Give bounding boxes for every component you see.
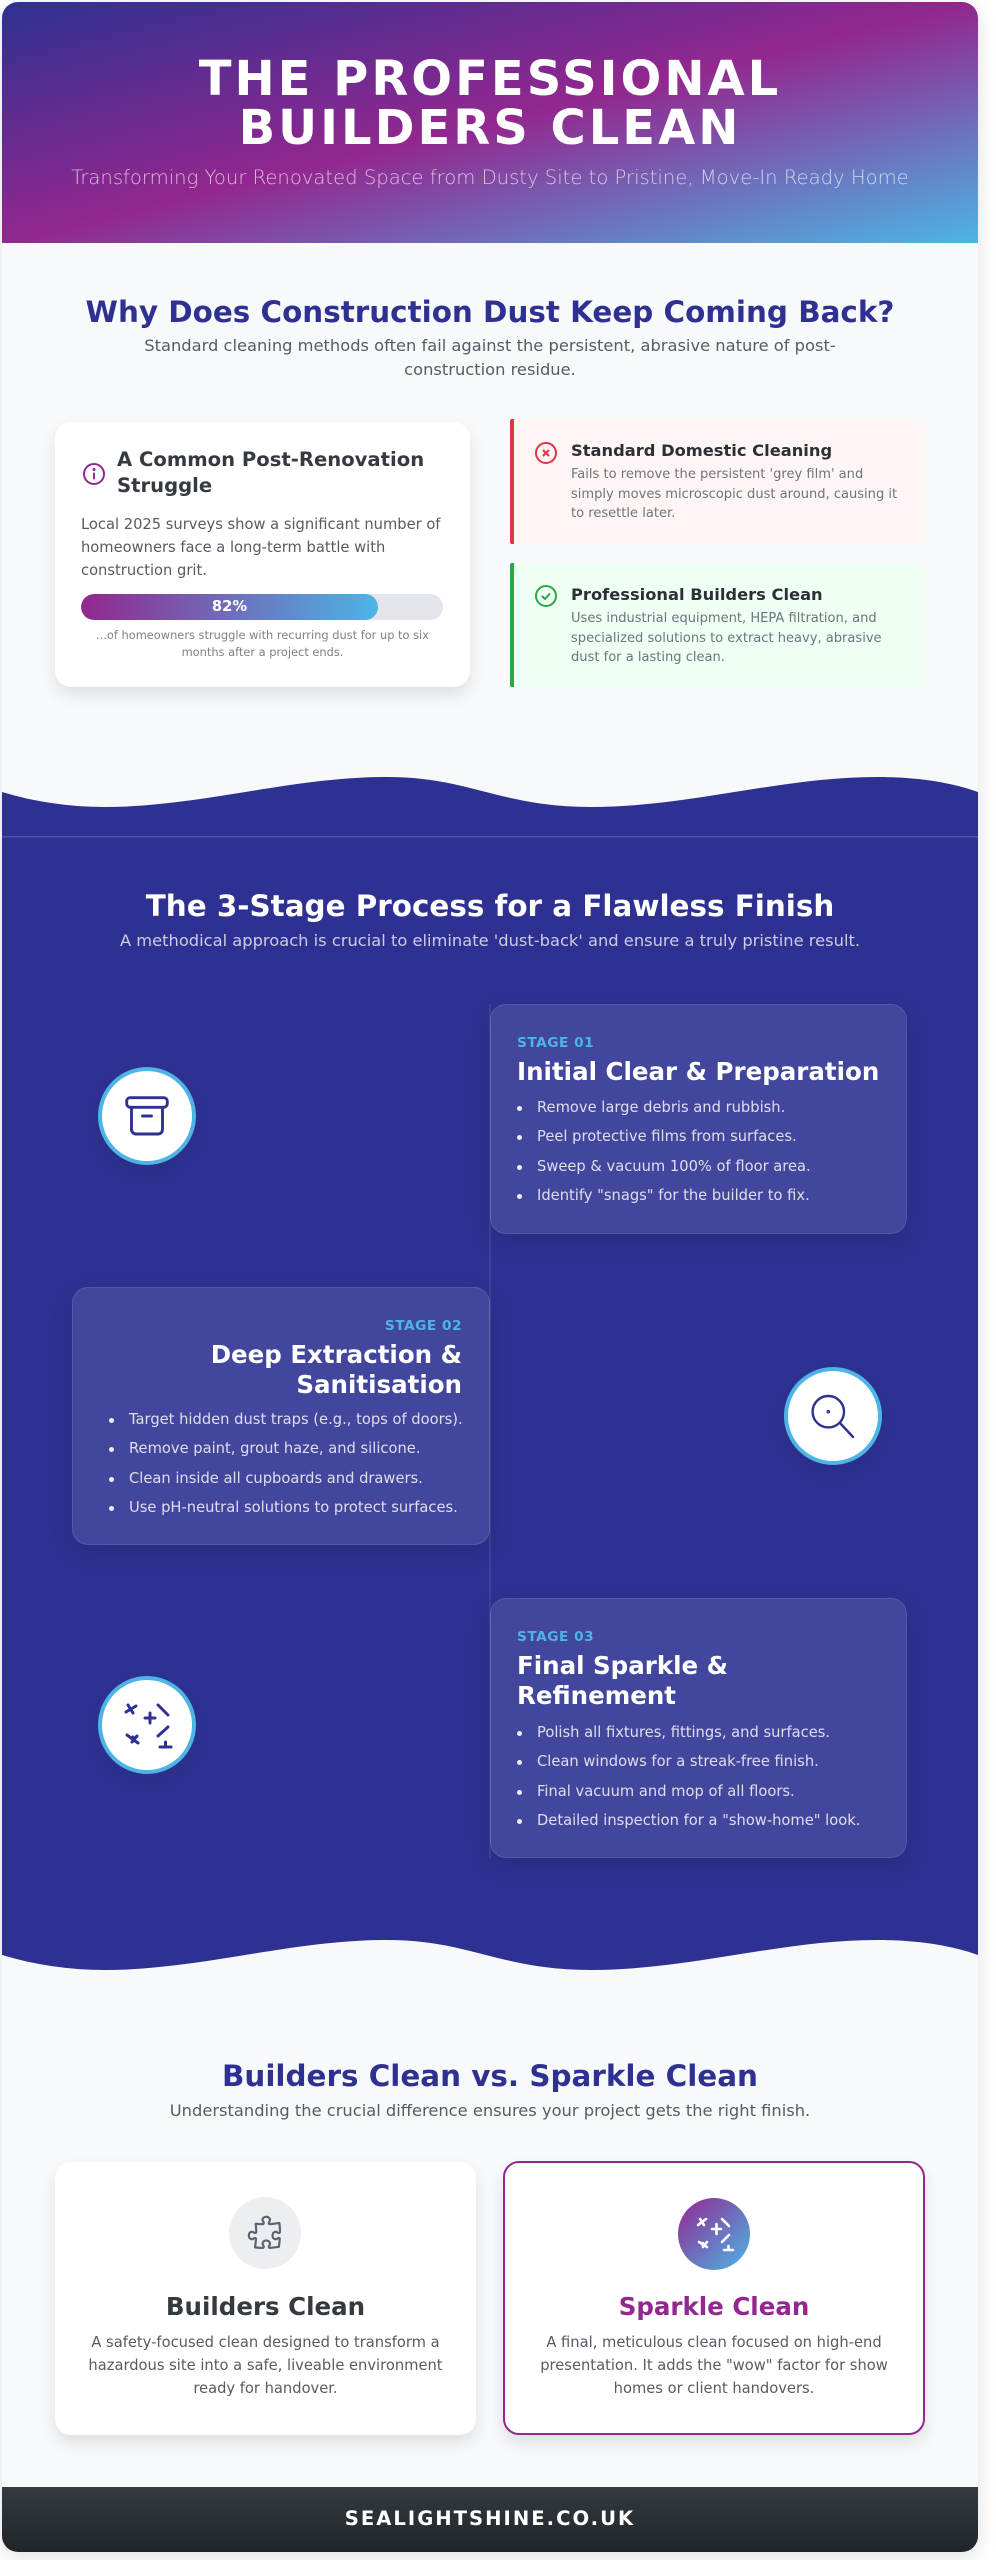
card description: to resettle later.	[571, 506, 675, 521]
bar fill	[81, 594, 378, 620]
icon: x circle	[535, 442, 557, 464]
stage checklist: Use pH-neutral solutions to protect surfaces.	[129, 1499, 458, 1516]
card text	[542, 2336, 888, 2393]
card description	[571, 468, 897, 517]
card heading: Struggle	[117, 474, 212, 497]
card title: Professional Builders Clean	[571, 585, 823, 604]
panel: professional builders clean	[510, 563, 881, 687]
panel: standard domestic cleaning	[510, 419, 925, 544]
section intro: dust: Standard cleaning methods often fail against the persistent, abrasive nature of post-	[144, 336, 836, 355]
stage checklist	[517, 1100, 810, 1203]
panel: stage 01	[490, 1004, 907, 1234]
card text: homes or client handovers.	[614, 2380, 814, 2397]
section intro: comparison: Understanding the crucial difference ensures your project gets the right finish.	[170, 2101, 810, 2120]
stage checklist: Detailed inspection for a "show-home" look.	[537, 1812, 860, 1829]
stage label: STAGE 03	[517, 1629, 594, 1645]
stage checklist: Final vacuum and mop of all floors.	[537, 1783, 795, 1800]
stage label: STAGE 02	[385, 1318, 462, 1334]
card text	[90, 2336, 442, 2396]
main title: THE PROFESSIONAL	[199, 51, 781, 107]
card text: hazardous site into a safe, liveable environment	[88, 2357, 443, 2374]
subtitle: Transforming Your Renovated Space from Dusty Site to Pristine, Move-In Ready Home	[71, 166, 909, 189]
icon: magnifying glass	[784, 1367, 882, 1465]
panel: stage 02	[72, 1287, 490, 1545]
icon: sparkle badge	[678, 2198, 750, 2270]
panel: common struggle	[55, 422, 470, 687]
stage title: Refinement	[517, 1680, 676, 1710]
card text: construction grit.	[81, 562, 207, 579]
stage checklist	[109, 1412, 462, 1515]
section heading: dust: Why Does Construction Dust Keep Coming Back?	[86, 295, 894, 329]
card description	[572, 612, 881, 664]
bar caption	[97, 630, 428, 658]
card description: simply moves microscopic dust around, causing it	[571, 487, 897, 502]
stage title	[213, 1344, 461, 1394]
card title: Builders Clean	[166, 2292, 365, 2321]
panel: sparkle clean	[503, 2161, 925, 2435]
panel: builders clean	[55, 2162, 476, 2435]
bar fill: 82%	[212, 598, 247, 615]
panel: process background with waves	[2, 777, 978, 1970]
card description: specialized solutions to extract heavy, abrasive	[571, 631, 882, 646]
card text: presentation. It adds the "wow" factor for show	[540, 2357, 888, 2374]
card text	[82, 518, 441, 578]
bar caption: months after a project ends.	[182, 644, 343, 658]
bar caption: ...of homeowners struggle with recurring dust for up to six	[96, 628, 429, 642]
section heading: comparison: Builders Clean vs. Sparkle Clean	[222, 2059, 758, 2093]
stage checklist: Remove paint, grout haze, and silicone.	[129, 1440, 421, 1457]
icon: sparkle	[98, 1676, 196, 1774]
stage checklist: Remove large debris and rubbish.	[537, 1099, 785, 1116]
panel: stage 03	[490, 1598, 907, 1858]
icon: archive box	[98, 1067, 196, 1165]
stage title	[519, 1655, 727, 1704]
stage title: Final Sparkle &	[517, 1651, 728, 1680]
stage checklist: Clean windows for a streak-free finish.	[537, 1753, 819, 1770]
stage checklist: Peel protective films from surfaces.	[537, 1128, 797, 1145]
icon: puzzle piece	[229, 2197, 301, 2269]
main title: BUILDERS CLEAN	[239, 100, 741, 156]
card text: Local 2025 surveys show a significant number of	[81, 516, 440, 533]
stage checklist: Clean inside all cupboards and drawers.	[129, 1470, 423, 1487]
header banner	[2, 2, 978, 243]
card title: Sparkle Clean	[619, 2292, 809, 2321]
card description: Fails to remove the persistent 'grey film' and	[571, 467, 863, 482]
stage checklist: Polish all fixtures, fittings, and surfaces.	[537, 1724, 830, 1741]
icon: info	[83, 463, 105, 485]
footer bar	[2, 2487, 978, 2553]
footer website: SEALIGHTSHINE.CO.UK	[345, 2507, 635, 2530]
card text: A safety-focused clean designed to transform a	[91, 2334, 440, 2351]
section intro: dust	[145, 339, 835, 375]
section intro: process: A methodical approach is crucial to eliminate 'dust-back' and ensure a truly pristine result.	[120, 931, 860, 950]
stage label: STAGE 01	[517, 1035, 594, 1051]
card heading	[117, 451, 423, 496]
card description: dust for a lasting clean.	[571, 650, 725, 665]
stage checklist: Target hidden dust traps (e.g., tops of doors).	[129, 1411, 463, 1428]
section heading: process: The 3-Stage Process for a Flawless Finish	[146, 889, 834, 923]
stage checklist	[517, 1726, 859, 1828]
card description: Uses industrial equipment, HEPA filtration, and	[571, 611, 877, 626]
stage checklist: Sweep & vacuum 100% of floor area.	[537, 1158, 811, 1175]
progress bar: 82%	[81, 594, 443, 620]
icon: check circle	[535, 585, 557, 607]
stage checklist: Identify "snags" for the builder to fix.	[537, 1187, 810, 1204]
stage title: Deep Extraction &	[211, 1340, 462, 1369]
stage title: Initial Clear & Preparation	[517, 1057, 879, 1086]
main title	[198, 59, 777, 144]
card title: Standard Domestic Cleaning	[571, 441, 832, 460]
card heading: A Common Post-Renovation	[117, 448, 424, 471]
card text: A final, meticulous clean focused on high-end	[546, 2334, 882, 2351]
card text: ready for handover.	[193, 2380, 338, 2397]
stage title: Sanitisation	[296, 1370, 462, 1398]
card text: homeowners face a long-term battle with	[81, 539, 385, 556]
section intro: dust: construction residue.	[404, 360, 576, 379]
